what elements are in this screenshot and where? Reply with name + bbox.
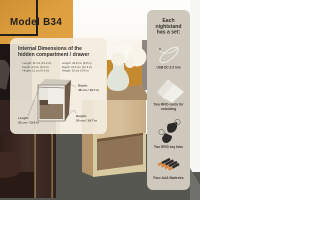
icon: USB cable (158, 45, 180, 65)
label: RFID cards (154, 102, 184, 111)
spec list: left column: Length: 31 cm (12.2 in) (22, 61, 51, 65)
background photo: room (0, 0, 200, 200)
heading: each nightstand has a set: has a set: (157, 30, 181, 36)
spec list: right column: Length: 24.8 cm (9.8 in) (62, 61, 92, 65)
spec list: right column: Height: 10 cm (3.9 in) (62, 69, 89, 73)
label: height (76, 114, 97, 122)
heading: internal dimensions: Internal Dimensions of the (18, 46, 82, 52)
model title: Model B34 (10, 17, 62, 28)
heading: each nightstand has a set: nightstand (155, 24, 182, 30)
label: depth (78, 84, 99, 92)
icon: AAA batteries (158, 159, 179, 170)
heading: internal dimensions: hidden compartment / drawer (18, 52, 89, 58)
spec list: left column: Height: 11 cm (4.3 in) (22, 69, 49, 73)
sofa (0, 44, 56, 198)
label: length: Length: (18, 116, 29, 120)
label: length (18, 116, 39, 124)
heading: internal dimensions (18, 46, 89, 58)
label: height: 50 cm / 19.7 in (76, 118, 97, 122)
panel: set contents (147, 10, 190, 190)
spec list: left column: Depth: 24 cm (9.4 in) (22, 65, 49, 69)
label: AAA batteries: Four AAA Batteries (153, 176, 184, 180)
heading: each nightstand has a set: Each (162, 18, 175, 24)
label: USB DC: USB DC 3.5 mm (156, 66, 181, 70)
label: height: Height: (76, 114, 87, 118)
label: depth: 48 cm / 18.7 in (78, 88, 99, 92)
icon: RFID cards (157, 79, 184, 103)
spec list: left column (22, 61, 51, 73)
heading: each nightstand has a set (155, 18, 182, 36)
label: RFID cards: unlocking (161, 107, 176, 111)
spec list: right column (62, 61, 92, 73)
label: RFID cards: Two RFID cards for (154, 102, 184, 106)
spec list: right column: Depth: 31.4 cm (12.3 in) (62, 65, 92, 69)
diagram: nightstand drawer dimensions (28, 79, 76, 121)
label: key fobs: Two RFID key fobs (154, 145, 183, 149)
nightstand (82, 100, 146, 177)
label: depth: Depth: (78, 84, 88, 88)
panel: internal dimensions (10, 38, 107, 134)
tray and vase with flowers (103, 40, 147, 100)
label: length: 35 cm / 13.8 in (18, 120, 39, 124)
icon: RFID key fobs (159, 119, 180, 143)
